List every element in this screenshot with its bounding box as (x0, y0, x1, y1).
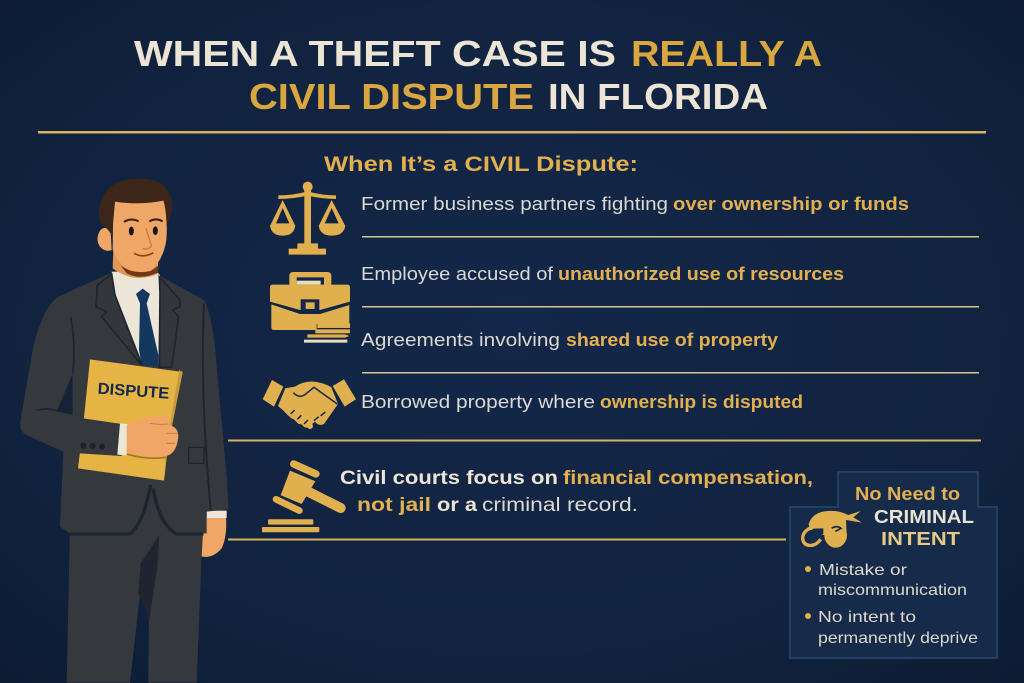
civil courts statement: Civil courts focus on (340, 468, 558, 489)
icon: briefcase (270, 272, 350, 343)
title: IN FLORIDA (548, 76, 768, 117)
row 3 text (361, 330, 778, 350)
neck and head (113, 250, 158, 278)
civil courts statement: financial compensation, (563, 468, 813, 489)
bullet list: miscommunication (818, 582, 967, 599)
hair (99, 178, 172, 235)
title (134, 33, 822, 117)
icon: intent symbol (803, 511, 862, 548)
civil courts statement: not jail (357, 495, 431, 516)
row 4 text: ownership is disputed (600, 392, 803, 412)
right hand (202, 517, 226, 557)
icon: handshake (263, 379, 356, 427)
row 1 text: over ownership or funds (673, 194, 909, 214)
icon: scales of justice (270, 182, 345, 255)
section heading: When It’s a CIVIL Dispute: (324, 153, 638, 176)
row 1 text: Former business partners fighting (361, 194, 668, 214)
shirt cuff (117, 423, 127, 455)
lapels (96, 274, 142, 364)
panel heading: CRIMINAL (874, 507, 974, 527)
panel heading: INTENT (881, 529, 960, 549)
hand on folder (127, 415, 178, 457)
title: REALLY A (631, 33, 822, 74)
title: WHEN A THEFT CASE IS (134, 33, 616, 74)
jacket (20, 273, 229, 533)
civil courts statement (340, 468, 813, 516)
face features (124, 219, 163, 222)
row 4 text (361, 392, 803, 412)
trousers (67, 477, 203, 683)
row 1 text (361, 194, 909, 214)
cuff (207, 511, 227, 518)
shirt (112, 272, 160, 363)
folder with DISPUTE label: DISPUTE (97, 381, 170, 403)
figure: lawyer holding folder (20, 178, 229, 683)
bullet list (805, 562, 978, 647)
row 2 text: Employee accused of (361, 264, 554, 284)
row 4 text: Borrowed property where (361, 392, 595, 412)
row 3 text: shared use of property (566, 330, 778, 350)
bullet list: No intent to (818, 609, 916, 626)
sleeve over folder (20, 411, 122, 456)
tie (136, 289, 158, 366)
icon: gavel (262, 464, 341, 532)
row 2 text: unauthorized use of resources (558, 264, 844, 284)
panel heading: No Need to (855, 484, 960, 504)
panel: no need to prove criminal intent (790, 472, 997, 658)
civil courts statement: criminal record. (482, 495, 638, 516)
title: CIVIL DISPUTE (249, 76, 534, 117)
civil courts statement: or a (437, 495, 477, 516)
row 3 text: Agreements involving (361, 330, 560, 350)
bullet list: Mistake or (819, 562, 908, 579)
bullet list: permanently deprive (818, 630, 978, 647)
panel heading (855, 484, 974, 549)
folder with DISPUTE label (78, 359, 183, 481)
row 2 text (361, 264, 844, 284)
